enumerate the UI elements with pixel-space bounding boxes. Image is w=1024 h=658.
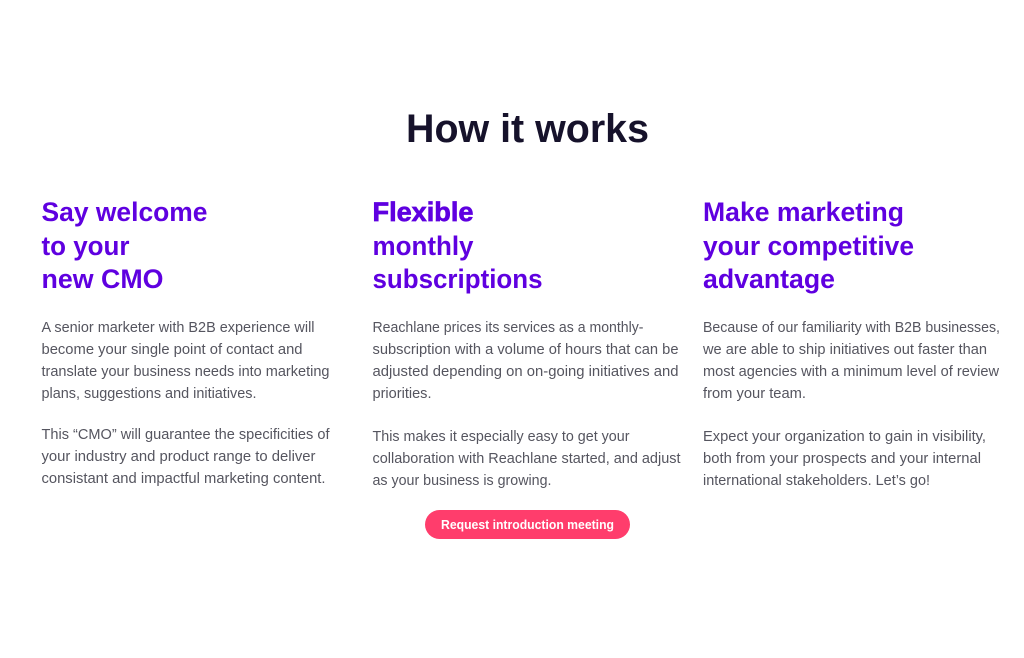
text block: monthly subscription pricing xyxy=(372,320,678,402)
text block: senior marketer: plans, suggestions and initiatives. xyxy=(42,386,256,402)
panel: make marketing your competitive advantage xyxy=(702,197,1000,489)
text block: easy to start: as your business is growing. xyxy=(372,473,552,489)
text block: B2B familiarity: we are able to ship initiatives out faster than xyxy=(702,342,987,358)
text block: easy to start: This makes it especially easy to get your xyxy=(372,429,630,445)
text block: easy to start xyxy=(372,429,680,489)
button: request introduction meeting xyxy=(425,510,630,539)
heading: flexible monthly subscriptions xyxy=(372,197,542,294)
panel: flexible monthly subscriptions xyxy=(372,197,680,489)
text block: monthly subscription pricing: priorities. xyxy=(372,386,432,402)
heading: say welcome: new CMO xyxy=(42,264,164,294)
text block: CMO guarantee: your industry and product range to deliver xyxy=(42,449,316,465)
heading: make marketing: advantage xyxy=(703,264,835,294)
heading: say welcome xyxy=(42,197,208,294)
heading: make marketing xyxy=(703,197,914,294)
title: How it works xyxy=(406,107,649,151)
text block: B2B familiarity xyxy=(702,320,1000,402)
text block: monthly subscription pricing: adjusted depending on on-going initiatives and xyxy=(372,364,678,380)
text block: easy to start: collaboration with Reachlane started, and adjust xyxy=(372,451,680,467)
text block: senior marketer: become your single point of contact and xyxy=(42,342,302,358)
text block: CMO guarantee: consistant and impactful marketing content. xyxy=(42,471,326,487)
text block: visibility xyxy=(703,429,986,489)
text block: B2B familiarity: from your team. xyxy=(703,386,806,402)
heading: flexible monthly subscriptions: subscriptions xyxy=(372,264,542,294)
text block: visibility: both from your prospects and your internal xyxy=(703,451,981,467)
text block: visibility: international stakeholders. Let’s go! xyxy=(703,473,930,489)
heading: say welcome: Say welcome xyxy=(42,197,208,227)
heading: make marketing: Make marketing xyxy=(703,197,904,227)
heading: say welcome: to your xyxy=(42,231,130,261)
text block: visibility: Expect your organization to gain in visibility, xyxy=(703,429,986,445)
text block: monthly subscription pricing: Reachlane prices its services as a monthly- xyxy=(372,320,644,336)
text block: senior marketer xyxy=(42,320,330,402)
text block: B2B familiarity: most agencies with a minimum level of review xyxy=(703,364,1000,380)
text block: senior marketer: A senior marketer with B2B experience will xyxy=(42,320,314,336)
text block: B2B familiarity: Because of our familiarity with B2B businesses, xyxy=(703,320,1000,336)
button: request introduction meeting: Request introduction meeting xyxy=(441,518,614,532)
heading: flexible monthly subscriptions: monthly xyxy=(372,231,474,261)
text block: monthly subscription pricing: subscription with a volume of hours that can be xyxy=(372,342,678,358)
heading: make marketing: your competitive xyxy=(703,231,914,261)
text block: CMO guarantee xyxy=(42,427,330,487)
text block: senior marketer: translate your business needs into marketing xyxy=(42,364,330,380)
heading: flexible monthly subscriptions: Flexible xyxy=(372,197,474,227)
text block: CMO guarantee: This “CMO” will guarantee the specificities of xyxy=(42,427,330,443)
panel: say welcome to your new CMO xyxy=(42,197,330,487)
